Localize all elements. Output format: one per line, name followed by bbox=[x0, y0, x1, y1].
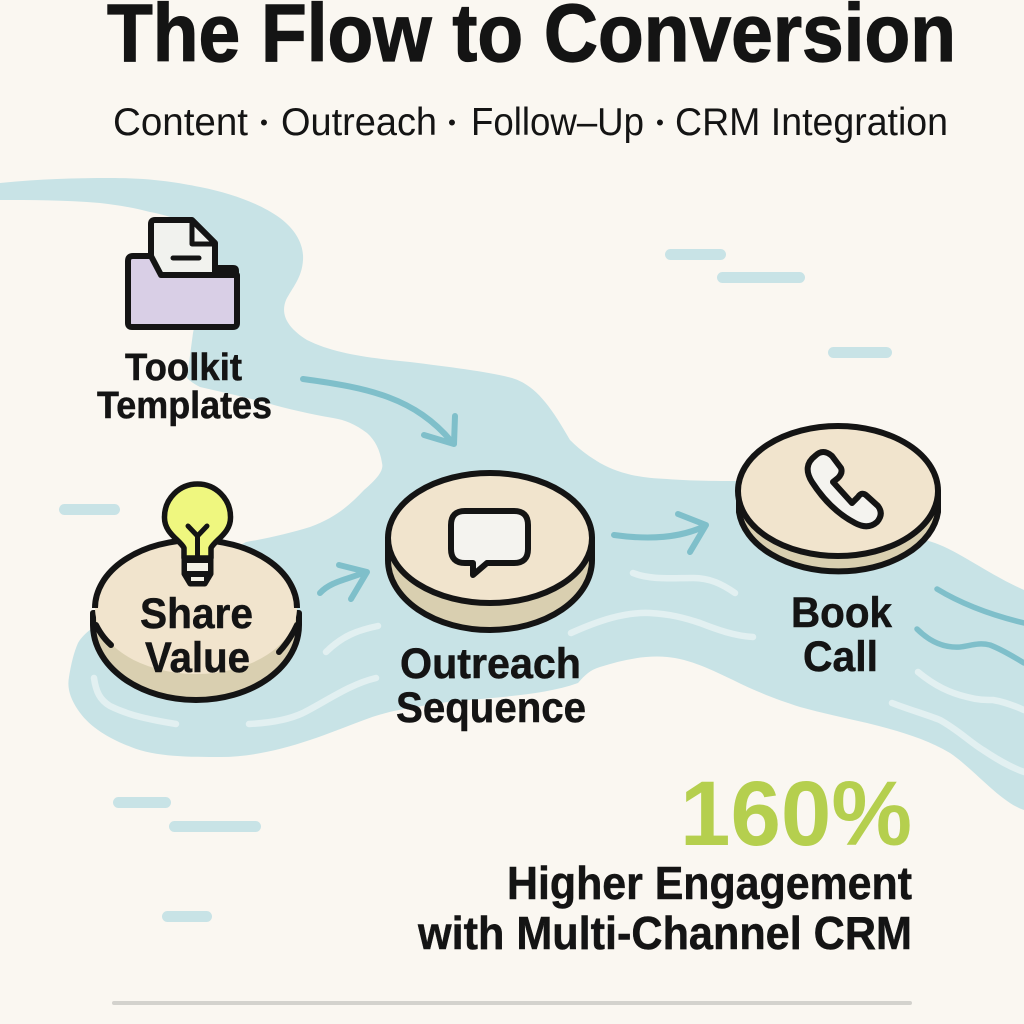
subtitle: • bbox=[656, 110, 664, 135]
label: outreach sequence bbox=[396, 640, 586, 732]
statistic caption: Higher Engagement bbox=[507, 857, 912, 909]
step: book call disc bbox=[738, 426, 938, 571]
darker current lines bbox=[917, 589, 1024, 663]
step: share value disc: Share bbox=[140, 590, 253, 638]
subtitle: CRM Integration bbox=[675, 101, 948, 144]
arrow: outreach to book call bbox=[614, 514, 706, 552]
label: book call: Book bbox=[791, 589, 892, 637]
footer rule bbox=[112, 1001, 912, 1005]
light water ripples bbox=[94, 573, 1024, 772]
subtitle: Outreach bbox=[281, 101, 437, 144]
label: book call bbox=[791, 589, 892, 681]
statistic caption bbox=[417, 857, 912, 959]
decorative stream dashes bbox=[59, 249, 892, 922]
subtitle: Follow–Up bbox=[471, 101, 644, 144]
icon: telephone handset bbox=[808, 452, 881, 526]
label: book call: Call bbox=[803, 633, 878, 681]
icon: light bulb bbox=[164, 484, 231, 584]
statistic caption: with Multi-Channel CRM bbox=[417, 907, 912, 959]
label: outreach sequence: Outreach bbox=[400, 640, 581, 688]
subtitle: • bbox=[260, 110, 268, 135]
label: toolkit templates bbox=[97, 347, 272, 427]
step: share value disc bbox=[93, 484, 299, 700]
label: toolkit templates: Toolkit bbox=[125, 347, 242, 389]
arrow: share value to outreach bbox=[320, 565, 367, 599]
label: toolkit templates: Templates bbox=[97, 385, 272, 427]
statistic: 160%: 160% bbox=[680, 763, 912, 865]
river background bbox=[0, 178, 1024, 810]
subtitle bbox=[113, 101, 948, 144]
subtitle: • bbox=[448, 110, 456, 135]
arrow: toolkit to outreach bbox=[303, 379, 455, 444]
step: share value disc: Value bbox=[145, 634, 250, 682]
label: outreach sequence: Sequence bbox=[396, 684, 586, 732]
step: outreach sequence disc bbox=[388, 473, 592, 630]
icon: toolkit folder with document bbox=[128, 220, 238, 327]
subtitle: Content bbox=[113, 101, 248, 144]
icon: chat bubble bbox=[451, 511, 528, 575]
